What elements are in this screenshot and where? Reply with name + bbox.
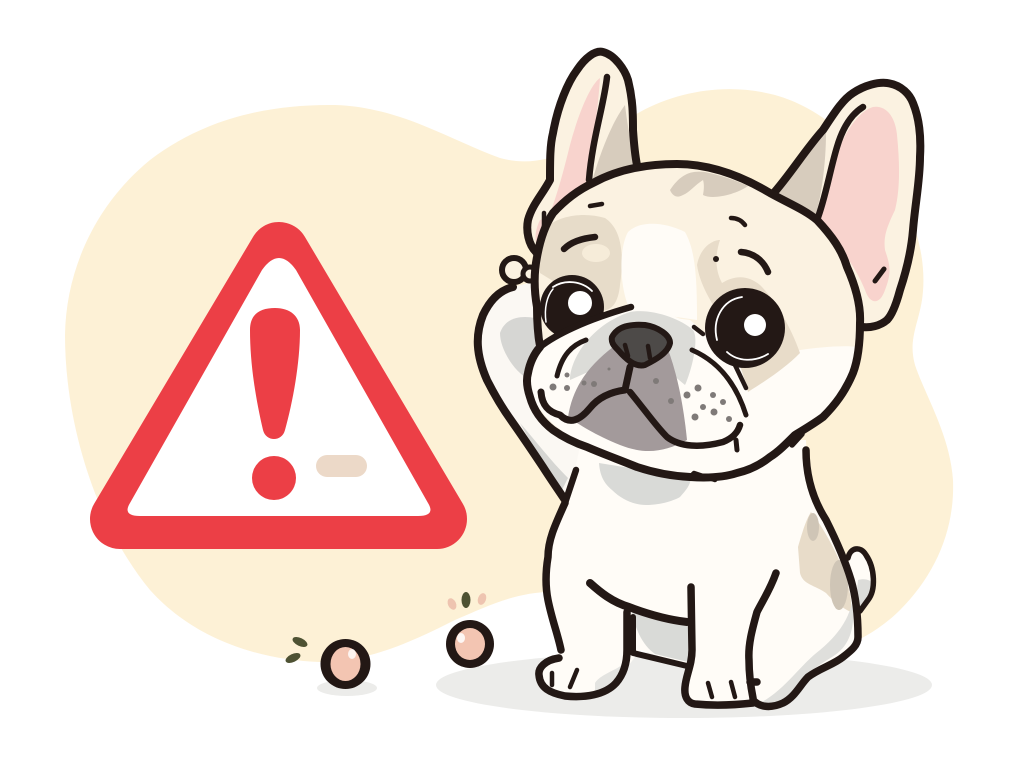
whisker dots: [550, 368, 732, 422]
eye right: [705, 288, 785, 368]
mouth and muzzle lines: [541, 327, 746, 450]
tail: [848, 549, 873, 611]
body: [539, 440, 858, 707]
near ear: [770, 83, 920, 327]
patches: [539, 215, 622, 310]
dog: [478, 52, 920, 707]
eyebrows and brow marks: [564, 204, 768, 272]
exclamation mark: [250, 308, 300, 500]
head outline: [527, 164, 860, 478]
raised arm and paw: [478, 258, 600, 503]
far ear: [527, 52, 637, 253]
warning triangle: [120, 252, 437, 519]
eye left: [540, 275, 604, 339]
head: [527, 164, 860, 480]
beige pill: [316, 455, 367, 477]
muzzle: [530, 307, 745, 445]
ball right: [446, 592, 494, 668]
background blob: [65, 89, 953, 662]
ball left: [284, 635, 377, 696]
nose: [612, 325, 670, 366]
ground shadow: [436, 652, 932, 718]
lower face white: [530, 310, 858, 476]
